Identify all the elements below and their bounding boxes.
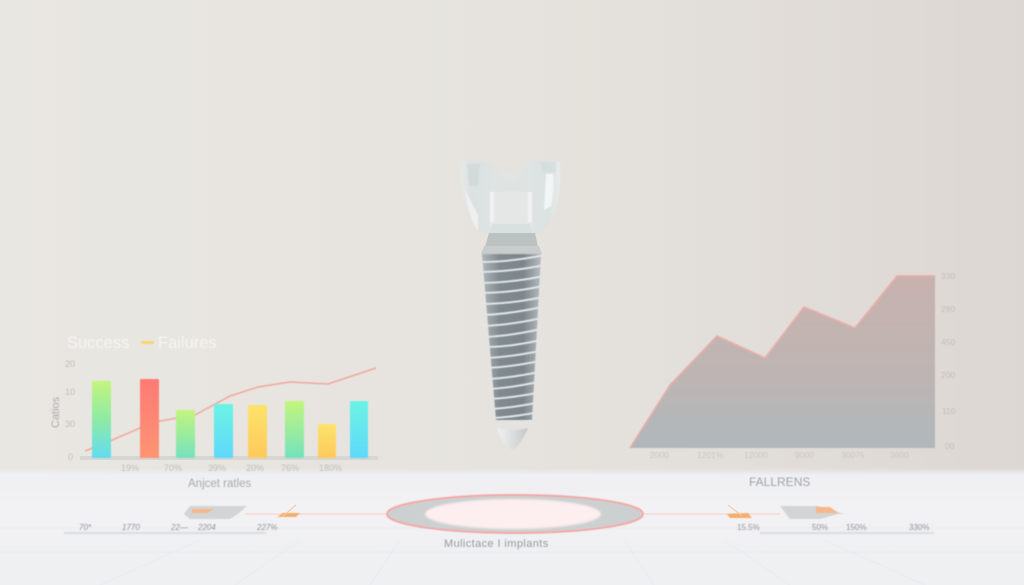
right value labels <box>737 523 929 532</box>
x axis labels: 180% <box>319 463 342 473</box>
right y axis labels: 450 <box>941 337 955 347</box>
x axis labels: 2000 <box>650 450 669 460</box>
central dental implant <box>461 161 560 450</box>
x axis baseline <box>80 456 378 460</box>
y axis labels: 30 <box>65 419 75 429</box>
right value labels: 15.5% <box>737 523 760 532</box>
y axis labels: 20 <box>65 359 75 369</box>
x axis labels: 70% <box>164 463 182 473</box>
x axis labels <box>650 450 909 460</box>
y axis labels <box>50 359 75 462</box>
right value labels: 150% <box>846 523 866 532</box>
x axis labels: 20% <box>246 463 264 473</box>
chart legend <box>67 334 217 352</box>
x axis labels: 1201% <box>697 450 724 460</box>
right caption strip <box>760 532 934 534</box>
crown <box>461 161 560 236</box>
right chart: failures area <box>630 271 956 489</box>
chart legend: Success <box>67 334 129 352</box>
left value labels: 1770 <box>122 523 140 532</box>
bottom centre ring <box>387 495 643 550</box>
bars <box>92 379 368 458</box>
left value labels: 2204 <box>197 523 216 532</box>
right y axis labels <box>941 271 956 451</box>
implant collar <box>490 224 532 235</box>
implant tip <box>497 428 528 450</box>
left value labels: 22— <box>170 523 189 532</box>
ring <box>387 495 643 533</box>
y axis labels: Catios <box>50 396 62 428</box>
x axis labels: 76% <box>281 463 299 473</box>
x axis labels: 3600 <box>890 450 909 460</box>
x axis labels: 39% <box>208 463 226 473</box>
thread ridges <box>478 255 545 426</box>
right value labels: 330% <box>909 523 929 532</box>
x axis labels: 30075 <box>841 450 865 460</box>
axis title: FALLRENS <box>749 475 810 489</box>
threaded shaft <box>482 254 541 420</box>
axis title: Anjcet ratles <box>188 478 252 490</box>
chart legend: Failures <box>158 334 217 352</box>
left chart: success and failures <box>50 334 378 490</box>
right y axis labels: 330 <box>941 271 955 281</box>
left value labels: 70* <box>79 523 92 532</box>
x axis labels: 12000 <box>744 450 768 460</box>
y axis labels: 10 <box>65 387 75 397</box>
ring label: Mulictace I implants <box>444 538 549 550</box>
right y axis labels: 110 <box>942 406 956 416</box>
right y axis labels: 200 <box>941 370 955 380</box>
left value labels: 227% <box>256 523 277 532</box>
floor with perspective grid <box>0 468 1024 585</box>
y axis labels: 0 <box>68 452 73 462</box>
trend line <box>85 368 376 451</box>
left value labels <box>79 523 277 532</box>
x axis labels: 19% <box>121 463 139 473</box>
right value labels: 50% <box>812 523 828 532</box>
right y axis labels: 00 <box>945 441 955 451</box>
x axis labels: 9000 <box>795 450 814 460</box>
right connector with markers <box>645 505 934 534</box>
x axis labels <box>121 463 342 473</box>
left connector with markers <box>64 505 386 534</box>
right y axis labels: 280 <box>941 304 955 314</box>
area <box>630 276 935 448</box>
area outline <box>630 276 935 448</box>
left caption strip <box>64 532 266 534</box>
